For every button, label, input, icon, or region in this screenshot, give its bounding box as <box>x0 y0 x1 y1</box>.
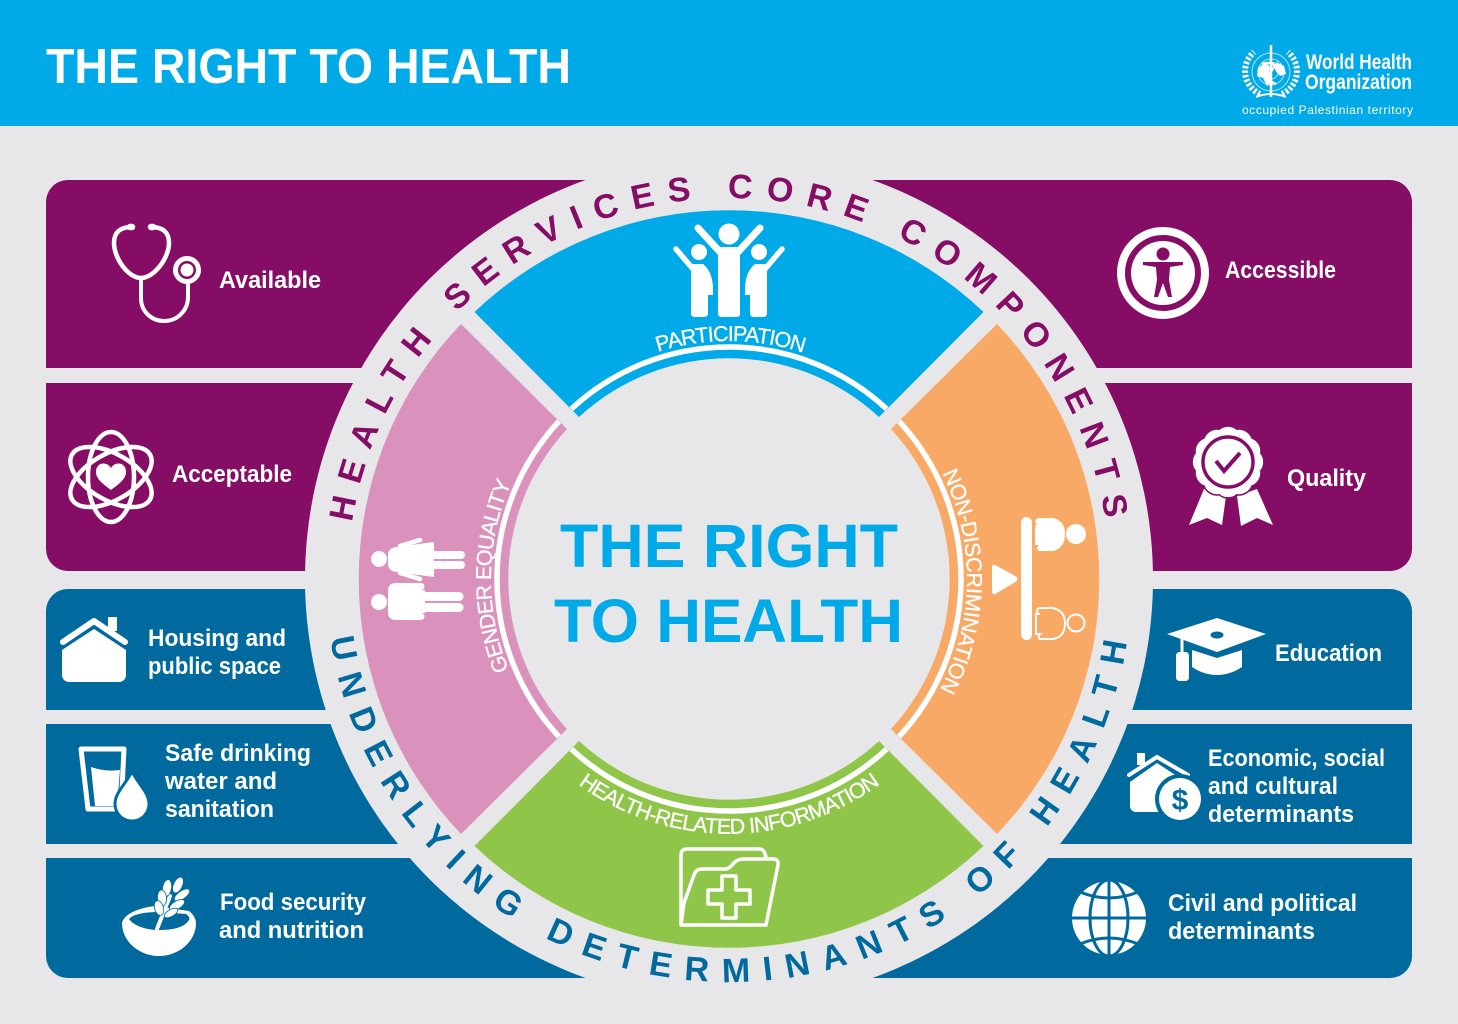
icon: stethoscope <box>114 227 198 321</box>
panel: education <box>729 589 1412 710</box>
label: Housing and public space <box>148 625 286 680</box>
label: Food security and nutrition: Food security <box>220 889 367 916</box>
heading: underlying determinants of health: UNDERLYING DETERMINANTS OF HEALTH <box>332 636 1127 982</box>
label: Economic, social and cultural determinants: and cultural <box>1208 773 1338 800</box>
label: Acceptable: Acceptable <box>172 461 292 488</box>
central title <box>554 512 903 655</box>
panel: acceptable <box>46 383 729 571</box>
label: Accessible: Accessible <box>1225 257 1336 284</box>
page title: THE RIGHT TO HEALTH <box>46 40 571 94</box>
segment: non-discrimination <box>891 324 1100 834</box>
segment: health-related information <box>474 741 984 948</box>
label: Economic, social and cultural determinants <box>1208 745 1385 828</box>
label: Housing and public space: Housing and <box>148 625 286 652</box>
panel: economic, social and cultural determinants <box>729 724 1412 844</box>
panel: accessible <box>729 180 1412 368</box>
label: Available: Available <box>219 267 321 294</box>
label: Education: Education <box>1275 640 1382 667</box>
label: Quality: Quality <box>1287 465 1367 492</box>
icon: people raising arms <box>676 224 782 317</box>
label: participation: PARTICIPATION <box>655 326 806 352</box>
icon: house with dollar coin: $ <box>1172 784 1189 817</box>
label: Civil and political determinants <box>1168 890 1357 945</box>
panel: civil and political determinants <box>729 858 1412 978</box>
label: Safe drinking water and sanitation: water and <box>164 768 277 795</box>
label: Housing and public space: public space <box>148 653 281 680</box>
central title: THE RIGHT <box>560 512 898 580</box>
label: Civil and political determinants: Civil and political <box>1168 890 1357 917</box>
segment: participation <box>474 210 984 417</box>
segment: gender equality <box>358 324 567 834</box>
heading: health services core components: HEALTH SERVICES CORE COMPONENTS <box>329 174 1127 520</box>
icon: quality rosette <box>1189 426 1273 526</box>
panel: food security <box>46 858 729 978</box>
panel: available <box>46 180 729 368</box>
label: Economic, social and cultural determinants: determinants <box>1208 801 1354 828</box>
icon: medical folder <box>681 849 778 925</box>
icon: house <box>62 617 126 682</box>
icon: atom heart <box>61 432 161 522</box>
WHO logo: World Health <box>1306 51 1412 74</box>
icon: globe <box>1071 880 1147 956</box>
label: Civil and political determinants: determinants <box>1168 918 1315 945</box>
label: Food security and nutrition <box>219 889 367 944</box>
header band <box>0 0 1458 126</box>
label: Safe drinking water and sanitation: Safe drinking <box>165 740 311 767</box>
label: Economic, social and cultural determinants: Economic, social <box>1208 745 1385 772</box>
icon: woman and man <box>371 540 465 620</box>
label: Safe drinking water and sanitation: sanitation <box>165 796 274 823</box>
central circle ring <box>305 155 1153 1003</box>
label: gender equality: GENDER EQUALITY <box>476 478 509 672</box>
panel: housing and public space <box>46 589 729 710</box>
icon: glass and water drop <box>81 749 149 821</box>
label: health-related information: HEALTH-RELATED INFORMATION <box>580 772 879 834</box>
label: Safe drinking water and sanitation <box>164 740 311 823</box>
panel: quality <box>729 383 1412 571</box>
WHO logo: occupied Palestinian territory <box>1242 103 1413 117</box>
icon: house with dollar coin <box>1129 753 1205 824</box>
icon: graduation cap <box>1167 618 1266 681</box>
central title: TO HEALTH <box>554 587 903 655</box>
icon: accessibility person <box>1121 231 1205 315</box>
icon: bowl and wheat <box>122 875 196 956</box>
icon: unequal people on a balance <box>993 517 1086 640</box>
label: non-discrimination: NON-DISCRIMINATION <box>940 468 982 695</box>
WHO logo <box>1242 45 1413 117</box>
label: Food security and nutrition: and nutrition <box>219 917 364 944</box>
WHO logo: Organization <box>1305 71 1412 94</box>
panel: safe drinking water <box>46 724 729 844</box>
